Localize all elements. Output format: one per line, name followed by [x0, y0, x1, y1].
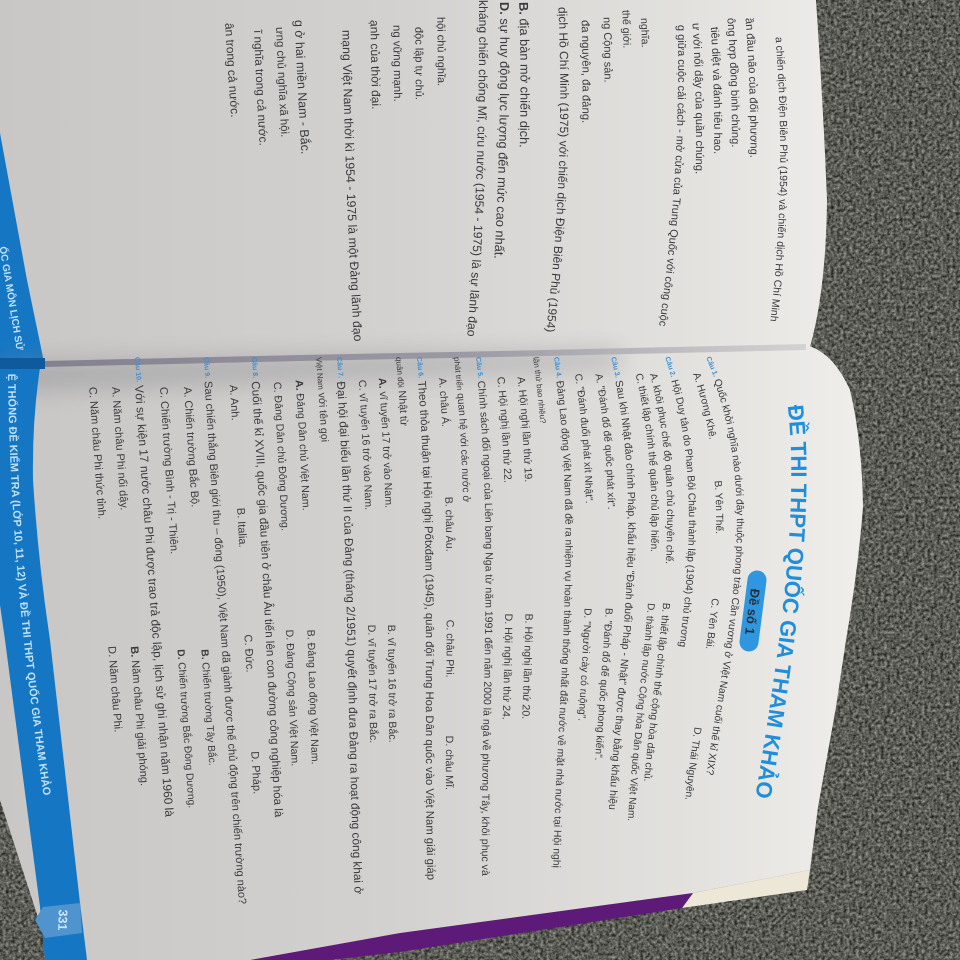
question 3: Câu 3. Sau khi Nhật đảo chính Pháp, khẩu hiệu "Đánh đuổi Pháp - Nhật" được thay bằng khẩu hiệu	[608, 357, 636, 810]
left page bottom section: độc lập tự chủ.	[413, 27, 424, 99]
question 5: B. châu Âu.	[442, 497, 456, 552]
question 1: B. Yên Thế.	[714, 481, 724, 533]
question 9: Câu 9. Sau chiến thắng Biên giới thu – đông (1950), Việt Nam đã giành được thế chủ động trên chiến trường nào?	[201, 357, 248, 905]
question 1: A. Hương Khê.	[693, 374, 716, 439]
left page top section: thế giới.	[620, 10, 632, 48]
left page top section	[466, 0, 788, 336]
left page bottom section: ưng chủ nghĩa xã hội.	[274, 28, 290, 136]
question 9: C. Chiến trường Bình - Trị - Thiên.	[157, 387, 180, 555]
book gutter	[45, 347, 806, 364]
question 2: A. khôi phục chế độ quân chủ chuyên chế.	[650, 374, 675, 564]
question 5: Câu 5. Chính sách đối ngoại của Liên bang Nga từ năm 1991 đến năm 2000 là ngả về phương Tây, khôi phục và	[474, 357, 495, 876]
question 2: C. thiết lập chính thể quân chủ lập hiến.	[636, 374, 660, 551]
question 8: B. Italia.	[234, 507, 248, 548]
left page top section: D. sự huy động lực lượng đến mức cao nhất.	[494, 2, 510, 258]
left page top section: nghĩa.	[639, 18, 650, 47]
question 6: D. vĩ tuyến 17 trở ra Bắc.	[365, 625, 380, 743]
question 7: Câu 7. Đại hội đại biểu lần thứ II của Đảng (tháng 2/1951) quyết định đưa Đảng ra hoạt động công khai ở	[334, 357, 366, 895]
question 3: D. "Người cày có ruộng".	[576, 608, 593, 722]
question 4: Câu 4. Đảng Lao động Việt Nam đã đề ra nhiệm vụ hoàn thành thống nhất đất nước về mặt nhà nước tại Hội nghị	[551, 356, 575, 868]
left page bottom section: ĩ nghĩa trong cả nước.	[252, 30, 268, 145]
left page bottom section: ng vững mạnh.	[391, 26, 402, 101]
question 7: B. Đảng Lao động Việt Nam.	[304, 629, 321, 765]
question 7: C. Đảng Dân chủ Đông Dương.	[271, 382, 291, 531]
question 7	[274, 357, 364, 894]
left page top section: ần đầu não của đối phương.	[746, 18, 758, 157]
left page bottom section: ân trong cả nước.	[225, 24, 240, 117]
main title: ĐỀ THI THPT QUỐC GIA THAM KHẢO	[756, 404, 810, 798]
left page body text	[225, 0, 788, 341]
question 5: phát triển quan hệ với các nước ở	[453, 357, 473, 503]
question 5: C. châu Phi.	[443, 620, 456, 678]
purple cover strip	[250, 893, 693, 960]
question 2: Câu 2. Hội Duy tân do Phan Bội Châu thành lập (1904) chủ trương	[666, 356, 696, 647]
left book page	[0, 0, 827, 368]
question 7: D. Đảng Cộng sản Việt Nam.	[283, 629, 301, 766]
left page top section: ng Cộng sản.	[602, 18, 613, 82]
question 8	[230, 357, 284, 818]
left page bottom section	[225, 18, 446, 341]
question 9: A. Chiến trường Bắc Bộ.	[181, 387, 201, 508]
question 4: B. Hội nghị lần thứ 20.	[519, 613, 535, 719]
question 3	[575, 357, 636, 810]
right book page	[0, 345, 863, 960]
left page bottom section: hội chủ nghĩa.	[436, 18, 446, 86]
right page questions	[89, 356, 744, 904]
left page bottom section: mạng Việt Nam thời kì 1954 - 1975 là một Đảng lãnh đạo	[340, 30, 362, 341]
left page top section: đa nguyên, đa đảng.	[580, 20, 591, 122]
left page bottom section: ạnh của thời đại.	[368, 20, 381, 108]
question 10	[89, 357, 174, 818]
question 4: A. Hội nghị lần thứ 19.	[515, 376, 534, 482]
left page top section: ông hợp đồng binh chủng.	[726, 18, 740, 146]
question 8: Câu 8. Cuối thế kỉ XVIII, quốc gia đầu tiên ở châu Âu tiến lên con đường công nghiệp hóa là	[249, 357, 285, 818]
question 4: C. Hội nghị lần thứ 22.	[494, 376, 513, 483]
question 9: B. Chiến trường Tây Bắc.	[199, 649, 219, 766]
question 6: quân đội Nhật từ	[395, 357, 410, 426]
left page top section: dịch Hồ Chí Minh (1975) với chiến dịch Điện Biên Phủ (1954)	[544, 8, 569, 332]
question 8: A. Anh.	[227, 385, 241, 421]
page number tab	[35, 903, 82, 938]
question 1: Câu 1. Quốc khởi nghĩa nào dưới đây thuộc phong trào Cần vương ở Việt Nam cuối thế kỉ XIX?	[706, 356, 744, 775]
question 2: B. thiết lập chính thể cộng hòa dân chủ.	[644, 603, 670, 780]
left page top section: a chiến dịch Điện Biên Phủ (1954) và chiến dịch Hồ Chí Minh	[770, 38, 788, 321]
question 5	[438, 357, 494, 876]
right page side band label: Ệ THỐNG ĐỀ KIỂM TRA (LỚP 10, 11, 12) VÀ ĐỀ THI THPT QUỐC GIA THAM KHẢO	[6, 374, 52, 795]
question 10: Câu 10. Với sự kiện 17 nước châu Phi được trao trả độc lập, lịch sử ghi nhận năm 1960 là	[132, 357, 176, 818]
question 4: D. Hội nghị lần thứ 24.	[500, 613, 514, 720]
left page bottom section: g ở hai miền Nam - Bắc.	[292, 20, 312, 154]
question 4: lần thứ bao nhiêu?	[532, 356, 548, 424]
left page top section: tiêu diệt và đánh tiêu hao.	[710, 26, 722, 154]
question 9	[160, 357, 246, 904]
exam number badge: Đề số 1	[745, 588, 760, 634]
question 1: C. Yên Bái.	[706, 598, 719, 648]
question 10: A. Năm châu Phi nổi dậy.	[109, 387, 130, 511]
cream page block	[682, 870, 810, 908]
right page blue side band	[0, 366, 87, 960]
question 3: A. "Đánh đổ đế quốc phát xít".	[595, 374, 616, 509]
question 6: C. vĩ tuyến 16 trở vào Nam.	[356, 380, 374, 510]
question 10: C. Năm châu Phi thức tỉnh.	[86, 387, 108, 519]
question 8: C. Đức.	[241, 634, 256, 673]
left page blue side band	[0, 133, 45, 367]
page number tab: 331	[58, 910, 68, 930]
question 9: D. Chiến trường Bắc Đông Dương.	[175, 649, 197, 808]
question 6: Câu 6. Theo thỏa thuận tại Hội nghị Pốtxđam (1945), quân đội Trung Hoa Dân quốc vào Việt Nam giải giáp	[415, 357, 437, 880]
question 10: B. Năm châu Phi giải phóng.	[128, 646, 150, 786]
question 3: C. "Đánh đuổi phát xít Nhật".	[572, 373, 594, 504]
question 6: A. vĩ tuyến 17 trở vào Nam.	[376, 378, 394, 508]
left page top section: kháng chiến chống Mĩ, cứu nước (1954 - 1975) là sự lãnh đạo	[466, 0, 488, 336]
question 1: D. Thái Nguyên.	[685, 728, 702, 799]
question 5: A. châu Á.	[436, 377, 452, 427]
left page top section: g giữa cuộc cải cách - mở cửa của Trung Quốc với công cuộc	[658, 25, 686, 326]
left page top section: ư với nổi dậy của quần chúng.	[692, 24, 704, 174]
gutter shading	[0, 352, 620, 392]
question 2: D. thành lập nước Cộng hòa Dân quốc Việt Nam.	[628, 604, 655, 820]
question 1	[685, 356, 744, 799]
question 2	[628, 356, 696, 820]
question 10: D. Năm châu Phi.	[105, 646, 124, 733]
question 7: A. Đảng Dân chủ Việt Nam.	[293, 380, 312, 511]
question 6: B. vĩ tuyến 16 trở ra Bắc.	[385, 625, 399, 743]
question 8: D. Pháp.	[248, 751, 263, 794]
left page top section: B. địa bàn mở chiến dịch.	[518, 2, 530, 146]
question 6	[358, 357, 436, 880]
question 3: B. "Đánh đổ đế quốc phong kiến".	[593, 608, 614, 761]
question 4	[498, 357, 574, 868]
question 5: D. châu Mĩ.	[443, 736, 455, 790]
question 7: Việt Nam với tên gọi	[315, 357, 330, 442]
band gutter shadow	[0, 358, 45, 369]
exam number badge	[740, 570, 766, 652]
